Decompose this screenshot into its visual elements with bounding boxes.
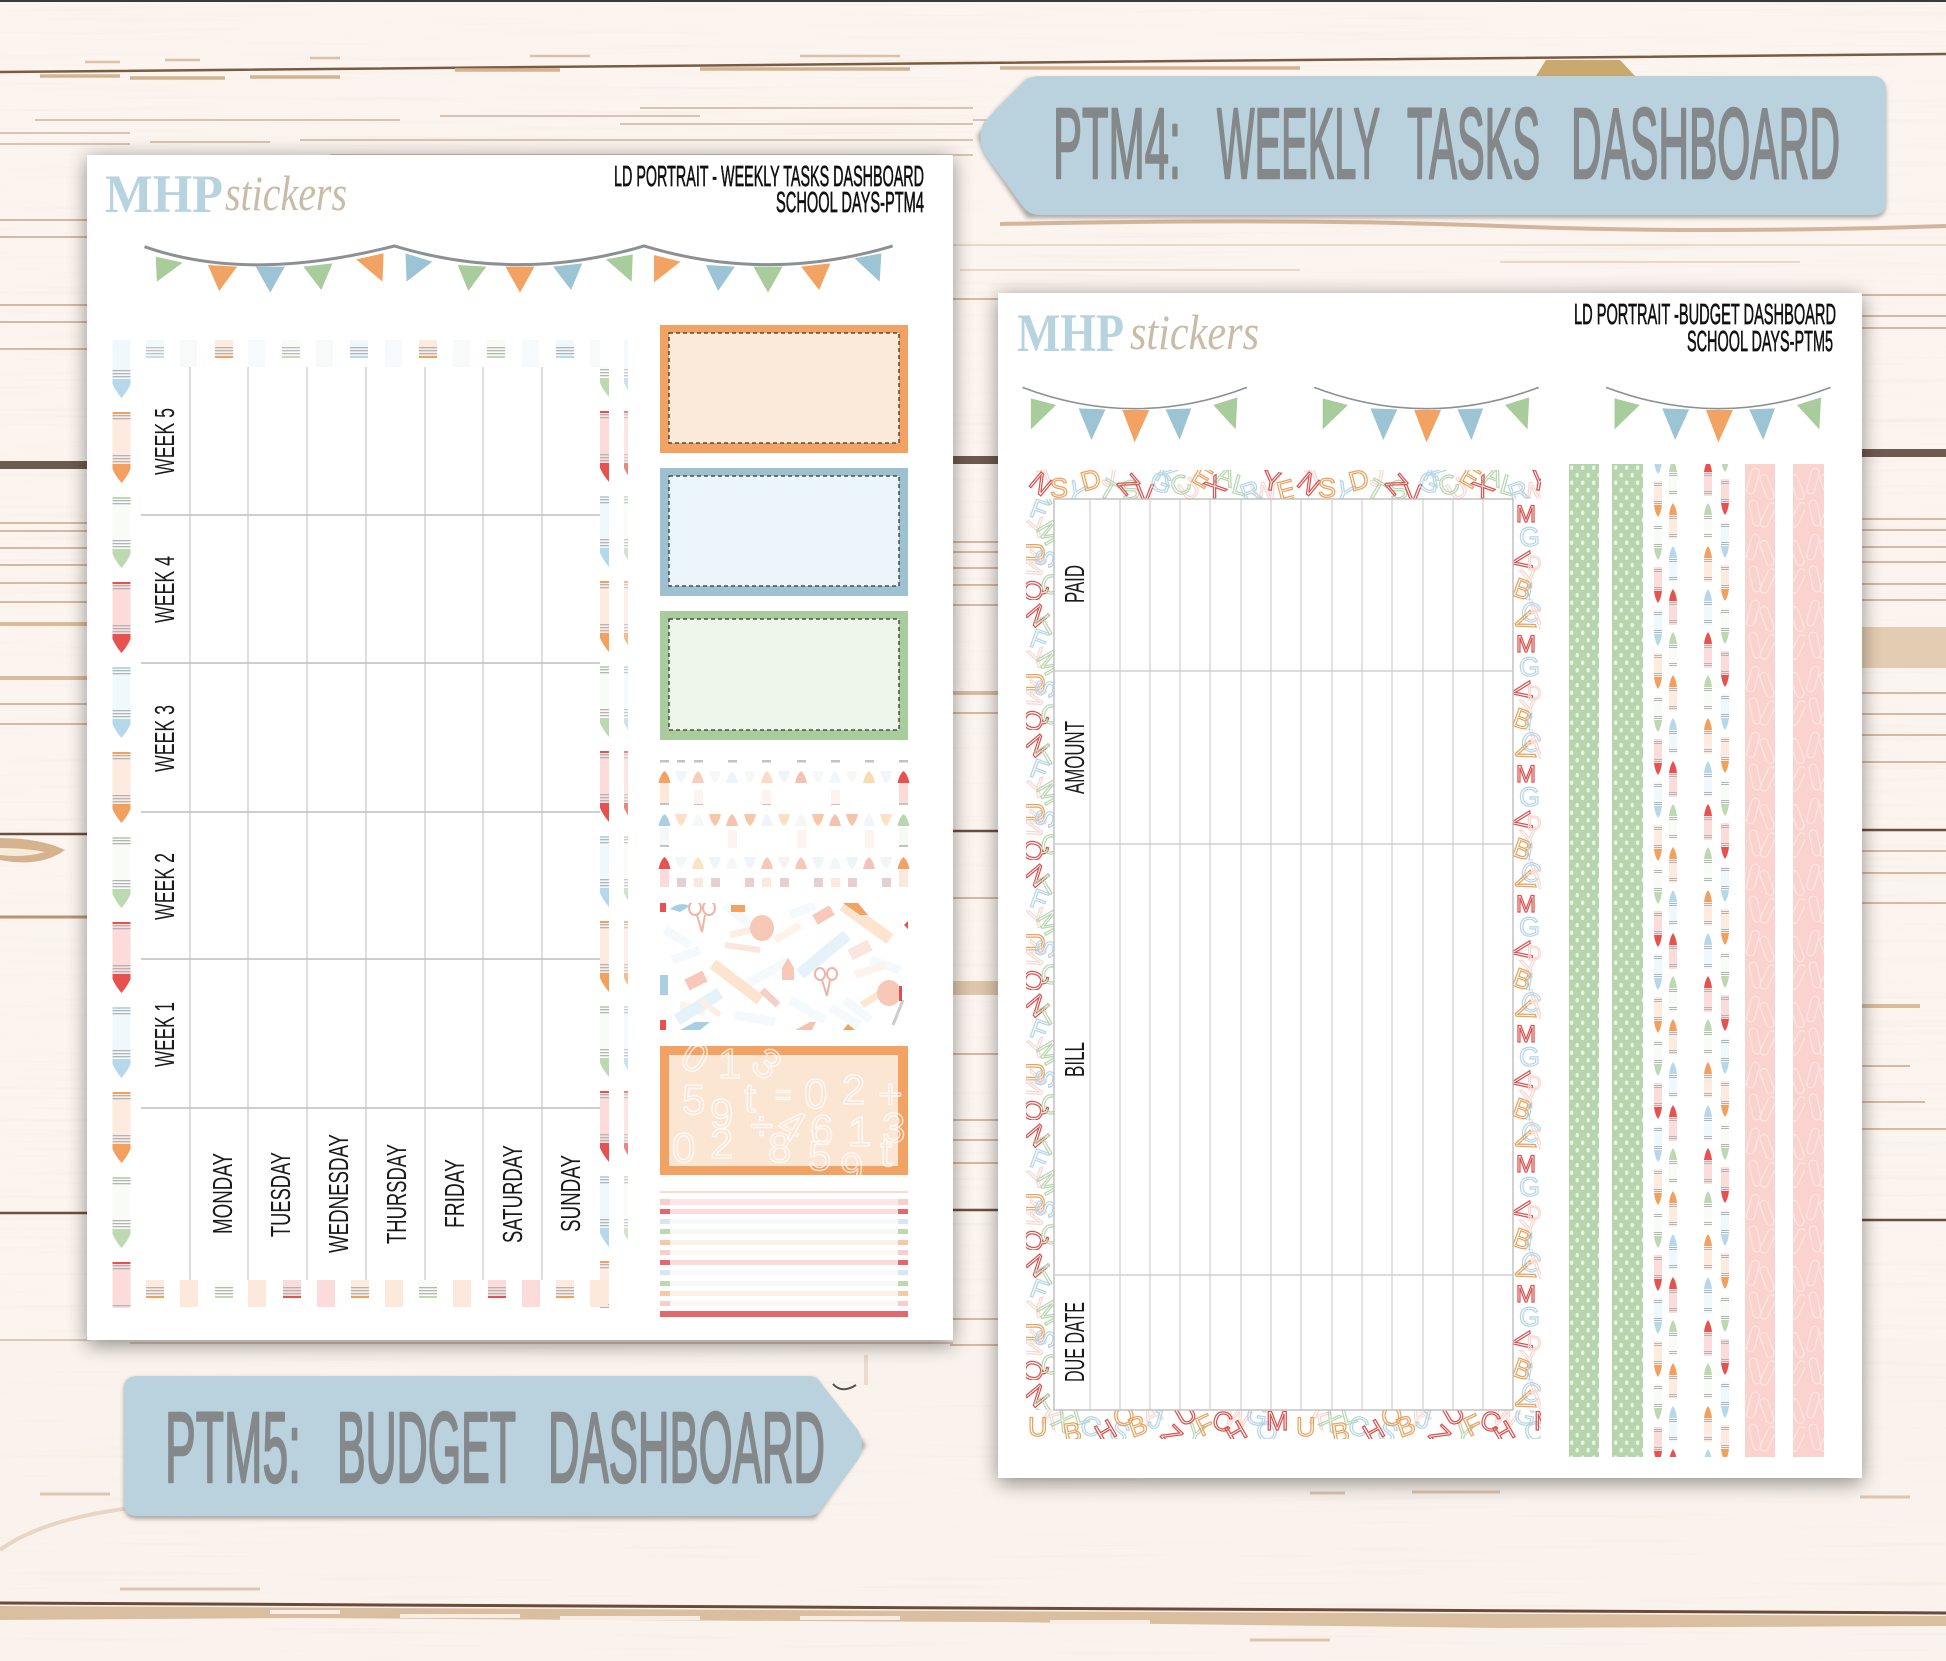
sheet heading: SCHOOL DAYS-PTM4: [776, 187, 924, 219]
math pattern box: 0: [804, 1070, 827, 1117]
stripe box: [660, 1191, 908, 1317]
math pattern box: ÷: [750, 1102, 773, 1149]
math pattern box: 0: [673, 1031, 717, 1083]
day labels: TUESDAY: [265, 1152, 296, 1237]
school supplies pattern box: [660, 901, 909, 1030]
crayon border: [112, 326, 642, 1333]
bunting banner: [145, 246, 893, 293]
math pattern box: 2: [710, 1120, 733, 1167]
pink paperclip strips: [1745, 464, 1824, 1457]
math pattern box: 5: [682, 1076, 705, 1123]
day labels: THURSDAY: [381, 1144, 412, 1244]
logo: [1017, 303, 1259, 363]
math pattern box: [660, 1046, 908, 1175]
day labels: SATURDAY: [497, 1145, 528, 1243]
banner: PTM4 weekly tasks dashboard: PTM4:: [1053, 88, 1181, 200]
day labels: WEDNESDAY: [323, 1134, 354, 1253]
column labels: AMOUNT: [1059, 721, 1090, 794]
math pattern box: 5: [808, 1132, 831, 1179]
math pattern box: t: [744, 1074, 756, 1121]
green polka dot strips: [1569, 464, 1643, 1457]
week labels: [149, 408, 180, 1067]
budget table grid: [1054, 499, 1513, 1410]
banner: PTM5 budget dashboard: DASHBOARD: [548, 1392, 825, 1504]
banner: PTM5 budget dashboard: [124, 1376, 866, 1519]
logo: MHP: [105, 164, 223, 224]
math pattern box: 1: [718, 1040, 741, 1087]
math pattern box: 4: [770, 1098, 814, 1151]
logo: stickers: [1130, 304, 1259, 360]
banner: PTM4 weekly tasks dashboard: [977, 76, 1886, 218]
banner: PTM4 weekly tasks dashboard: WEEKLY: [1217, 88, 1380, 200]
banner: PTM4 weekly tasks dashboard: TASKS: [1407, 88, 1540, 200]
bunting banners: [1022, 387, 1831, 442]
math pattern box: 3: [882, 1104, 905, 1151]
column labels: PAID: [1059, 565, 1090, 603]
math pattern box: 1: [848, 1108, 871, 1155]
day labels: MONDAY: [207, 1153, 238, 1234]
math pattern box: t: [880, 1128, 892, 1175]
blue dashed box: [660, 468, 908, 596]
math pattern box: +: [878, 1070, 903, 1117]
green dashed box: [660, 611, 908, 740]
math pattern box: 0: [672, 1124, 695, 1171]
week labels: WEEK 3: [149, 705, 180, 772]
math pattern box: 6: [810, 1106, 833, 1153]
weekly tasks grid: [141, 367, 600, 1280]
day labels: [207, 1134, 586, 1253]
week labels: WEEK 5: [149, 408, 180, 475]
week labels: WEEK 2: [149, 853, 180, 920]
banner: PTM5 budget dashboard: PTM5:: [165, 1392, 301, 1504]
panel: PTM4 weekly tasks sticker sheet: LD PORTRAIT - WEEKLY TASKS DASHBOARD: [614, 161, 924, 193]
math pattern box: 8: [768, 1124, 791, 1171]
column labels: [1059, 565, 1090, 1382]
math pattern box: 3: [743, 1038, 791, 1089]
day labels: SUNDAY: [555, 1155, 586, 1232]
alphabet border: [1026, 470, 1541, 1439]
week labels: WEEK 1: [149, 1002, 180, 1067]
column labels: DUE DATE: [1059, 1302, 1090, 1382]
banner: PTM5 budget dashboard: BUDGET: [337, 1392, 516, 1504]
math pattern box: 9: [840, 1144, 863, 1191]
logo: MHP: [1017, 303, 1124, 363]
column labels: BILL: [1059, 1042, 1090, 1077]
logo: [105, 164, 347, 224]
crayon strips: [1654, 464, 1729, 1457]
panel: PTM4 weekly tasks sticker sheet: [87, 155, 953, 1345]
week labels: WEEK 4: [149, 556, 180, 623]
sheet heading: [1574, 299, 1836, 358]
math pattern box: 9: [710, 1090, 733, 1137]
crayon pattern box: [658, 760, 910, 887]
logo: stickers: [225, 165, 347, 221]
sheet heading: [614, 161, 924, 219]
day labels: FRIDAY: [439, 1159, 470, 1228]
math pattern box: =: [775, 1079, 791, 1110]
math pattern box: 2: [842, 1066, 865, 1113]
orange dashed box: [660, 325, 908, 453]
panel: PTM5 budget sticker sheet: [998, 293, 1862, 1483]
